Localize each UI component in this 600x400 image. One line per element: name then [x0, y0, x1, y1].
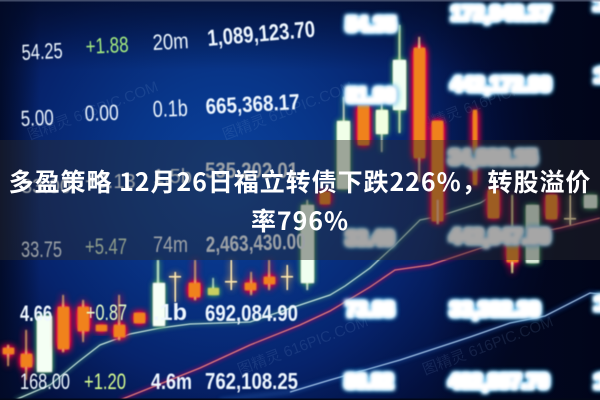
sharp left columns: 20m	[152, 28, 189, 55]
sharp left columns: .1b	[153, 299, 187, 325]
defocused right columns: 33.40	[346, 228, 394, 250]
sharp left columns: 33.75	[21, 237, 62, 262]
candlesticks: top right cluster	[337, 25, 477, 224]
watermarks	[25, 70, 556, 379]
defocused right columns: 54.35	[346, 14, 396, 36]
sharp left columns: 74m	[153, 232, 188, 257]
defocused right columns: 33,362.30	[450, 299, 540, 321]
watermarks: 图精灵 616PIC.COM	[25, 78, 161, 144]
defocused right columns: 51.90	[346, 85, 396, 107]
sharp left columns: +0.13	[85, 171, 136, 193]
sharp left columns	[20, 16, 316, 394]
sharp left columns: 54.25	[21, 38, 63, 65]
defocused right columns	[345, 0, 600, 393]
sharp left columns: +1.88	[85, 32, 129, 59]
sharp left columns: 4.66	[20, 301, 52, 326]
sharp left columns: 1,089,123.70	[206, 16, 316, 51]
sharp left columns: +0.87	[86, 300, 127, 325]
title overlay band	[0, 140, 600, 260]
sharp left columns: 0.1b	[152, 95, 188, 122]
defocused right columns: 442,172.90	[451, 74, 551, 96]
sharp left columns: 5.00	[20, 105, 54, 131]
watermarks: 图精灵 616PIC.COM	[235, 313, 371, 379]
defocused right columns: 34,808.35	[449, 147, 537, 169]
sharp left columns: 168.00	[20, 369, 70, 394]
sharp left columns: 665,368.17	[205, 89, 300, 119]
defocused right columns: 442,047.50	[450, 226, 550, 248]
sharp left columns: +1.20	[84, 369, 126, 394]
title: 多盈策略 12月26日福立转债下跌226%，转股溢价	[9, 163, 591, 199]
sharp left columns: 33.00	[21, 176, 71, 198]
sharp left columns: 1.5b	[153, 166, 192, 188]
candlesticks: lower cluster	[3, 190, 597, 380]
sharp left columns: 2,463,430.00	[205, 229, 306, 257]
title: 率796%	[251, 202, 349, 238]
defocused right columns: 172,948.37	[451, 3, 551, 25]
sharp left columns: 535,202.01	[205, 158, 298, 183]
sharp left columns: 0.00	[84, 100, 119, 126]
watermarks: 图精灵 616PIC.COM	[420, 313, 556, 379]
sharp left columns: 4.6m	[151, 369, 192, 394]
title	[9, 163, 591, 238]
sharp left columns: 692,084.90	[205, 300, 298, 326]
sharp left columns: +5.47	[85, 234, 127, 259]
defocused right columns: 462,897.70	[449, 371, 549, 393]
defocused right columns: 73.08	[346, 299, 394, 321]
watermarks: 图精灵 616PIC.COM	[415, 70, 551, 136]
trend lines	[15, 196, 600, 400]
sharp left columns: 762,108.25	[205, 368, 298, 394]
defocused right columns: 86.82	[345, 371, 393, 393]
watermarks: 图精灵 616PIC.COM	[220, 78, 356, 144]
